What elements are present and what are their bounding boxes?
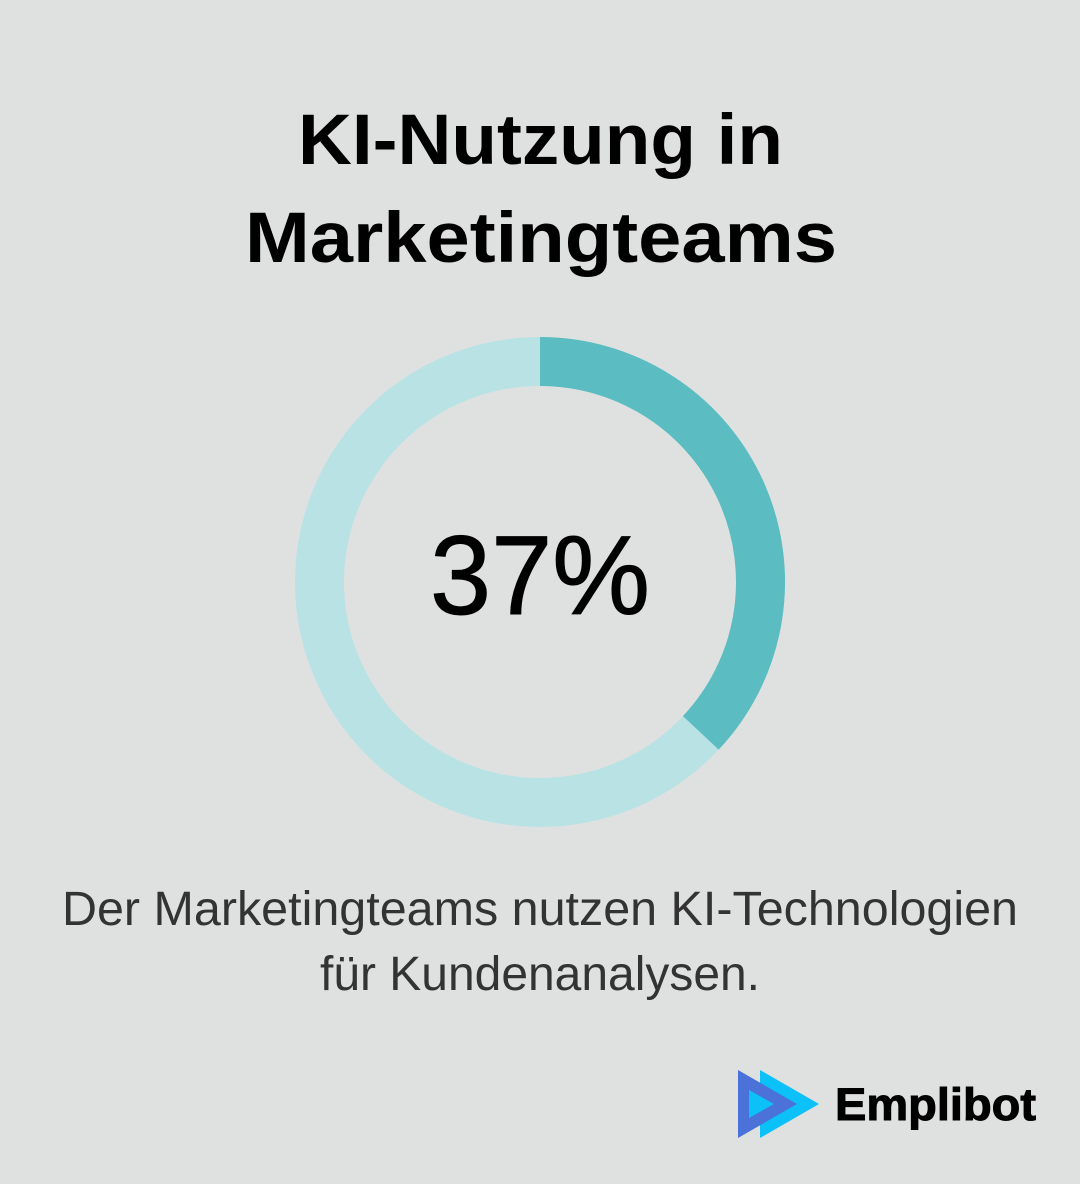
icon: play triangles: [738, 1070, 819, 1138]
title: Marketingteams: [245, 199, 837, 278]
logo: Emplibot: [738, 1070, 1036, 1138]
logo wordmark: Emplibot: [835, 1079, 1036, 1130]
title: [245, 101, 837, 278]
description text: [62, 883, 1018, 1001]
donut chart: 37%: [320, 362, 761, 802]
description text: für Kundenanalysen.: [320, 948, 760, 1001]
description text: Der Marketingteams nutzen KI-Technologien: [62, 883, 1018, 936]
percentage value: 37%: [430, 513, 650, 638]
title: KI-Nutzung in: [298, 101, 783, 180]
